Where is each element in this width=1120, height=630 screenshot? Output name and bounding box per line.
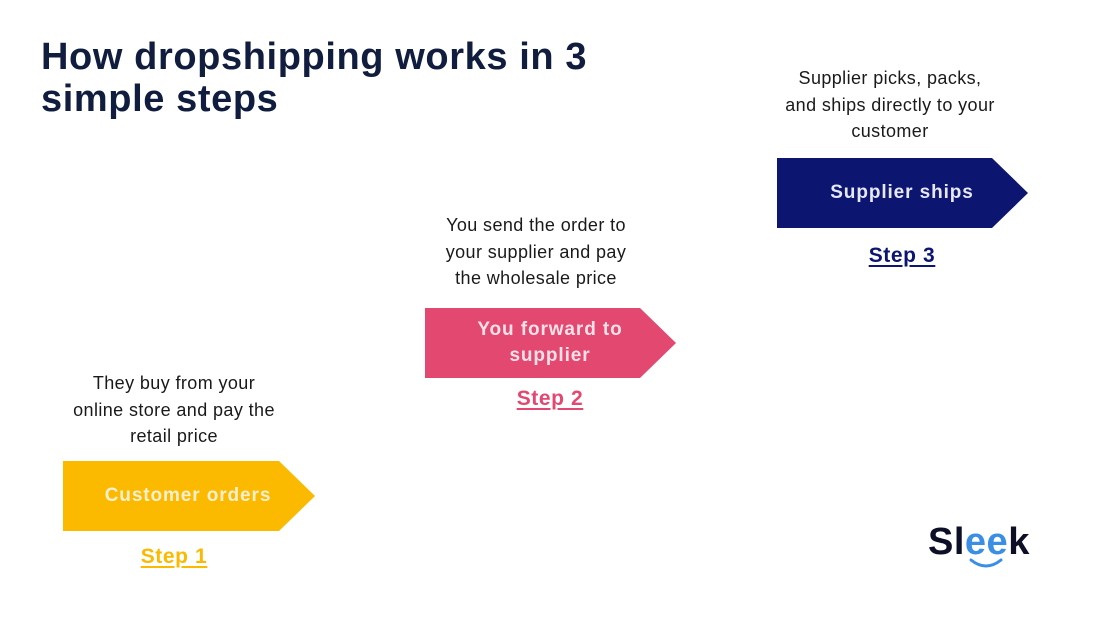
arrow: customer orders (63, 461, 315, 531)
label: step 2: Step 2 (517, 387, 583, 410)
label: step 3: Step 3 (869, 244, 935, 267)
title: How dropshipping works in 3 (41, 36, 587, 78)
text: step 2 description: the wholesale price (455, 268, 617, 288)
text: step 1 description: They buy from your (93, 373, 255, 393)
arrow: supplier ships (777, 158, 1028, 228)
logo: Sleek: Sleek (928, 521, 1030, 563)
arrow: customer orders: Customer orders (105, 485, 271, 506)
text: step 2 description: You send the order to (446, 215, 626, 235)
text: step 2 description: your supplier and pay (446, 242, 626, 262)
title (41, 36, 587, 120)
text: step 1 description: retail price (130, 426, 218, 446)
text: step 3 description: customer (851, 121, 929, 141)
arrow: you forward to supplier: supplier (509, 345, 591, 366)
arrow: you forward to supplier (425, 308, 676, 378)
title: simple steps (41, 78, 278, 120)
text: step 3 description: and ships directly to your (785, 94, 995, 114)
arrow: you forward to supplier: You forward to (477, 319, 623, 340)
text: step 1 description: online store and pay the (73, 400, 275, 420)
arrow: supplier ships: Supplier ships (830, 182, 974, 203)
text: step 3 description: Supplier picks, packs, (799, 68, 981, 88)
text: step 1 description (73, 373, 275, 446)
text: step 2 description (446, 215, 626, 288)
label: step 1: Step 1 (141, 545, 207, 568)
text: step 3 description (785, 68, 995, 141)
